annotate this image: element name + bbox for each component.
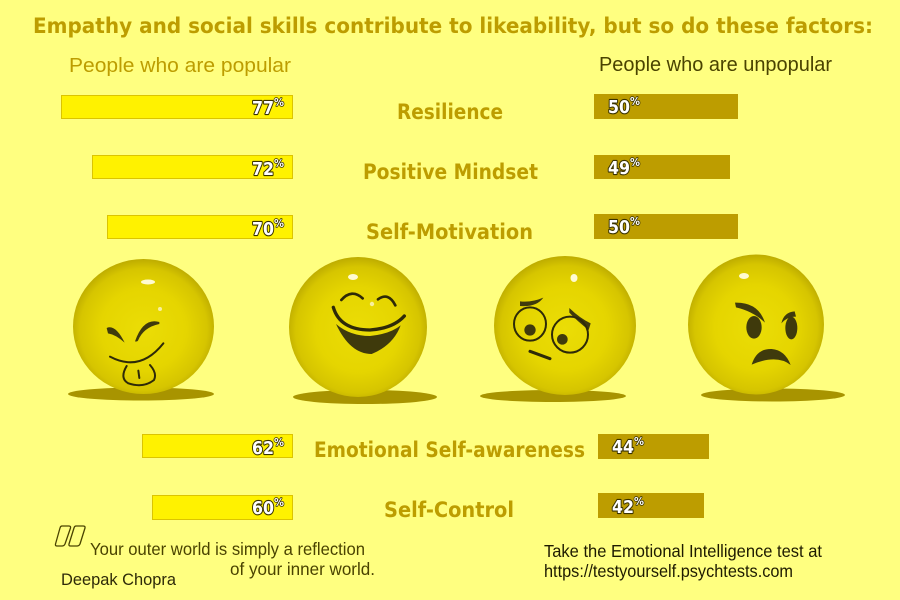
quote text <box>90 539 375 579</box>
row: Self-Control: Self-Control <box>384 498 514 522</box>
row: Self-Motivation: % <box>274 217 284 230</box>
row: Emotional Self-awareness <box>142 434 709 462</box>
row: Resilience: Resilience <box>397 100 503 124</box>
row: Self-Control: % <box>274 496 284 509</box>
quote text: Your outer world is simply a reflection <box>90 539 365 559</box>
row: Self-Motivation: % <box>630 215 640 228</box>
icon: tongue-out ball <box>68 259 214 400</box>
row: Positive Mindset <box>92 155 730 184</box>
row: Resilience <box>62 94 738 124</box>
row: Emotional Self-awareness: % <box>634 435 644 448</box>
row: Emotional Self-awareness: % <box>274 436 284 449</box>
row: Self-Control: 60 <box>252 498 274 519</box>
row: Resilience: % <box>274 96 284 109</box>
row: Self-Motivation: Self-Motivation <box>366 220 533 244</box>
row: Resilience: 50 <box>608 97 630 118</box>
icon: angry ball <box>688 254 845 402</box>
row: Positive Mindset: Positive Mindset <box>363 160 538 184</box>
icon: laughing ball <box>289 257 437 404</box>
row: Self-Control <box>152 493 704 522</box>
column heading: unpopular: People who are unpopular <box>599 54 832 76</box>
row: Resilience: 77 <box>252 98 274 119</box>
row: Emotional Self-awareness: 62 <box>252 438 274 459</box>
row: Resilience: % <box>630 95 640 108</box>
quote text: of your inner world. <box>230 559 375 579</box>
row: Emotional Self-awareness: 44 <box>612 437 634 458</box>
icon: worried ball <box>480 256 636 402</box>
call to action <box>544 541 822 581</box>
call to action: https://testyourself.psychtests.com <box>544 561 793 581</box>
row: Self-Motivation: 70 <box>252 219 274 240</box>
row: Self-Motivation <box>108 214 738 244</box>
row: Positive Mindset: % <box>630 156 640 169</box>
row: Positive Mindset: 72 <box>252 159 274 180</box>
call to action: Take the Emotional Intelligence test at <box>544 541 822 561</box>
quote author: Deepak Chopra <box>61 570 177 589</box>
row: Self-Motivation: 50 <box>608 217 630 238</box>
column heading: popular: People who are popular <box>69 55 291 77</box>
row: Emotional Self-awareness: Emotional Self-awareness <box>314 438 585 462</box>
row: Self-Control: 42 <box>612 497 634 518</box>
row: Positive Mindset: % <box>274 157 284 170</box>
row: Positive Mindset: 49 <box>608 158 630 179</box>
row: Self-Control: % <box>634 495 644 508</box>
icon: quotation marks <box>55 526 85 546</box>
